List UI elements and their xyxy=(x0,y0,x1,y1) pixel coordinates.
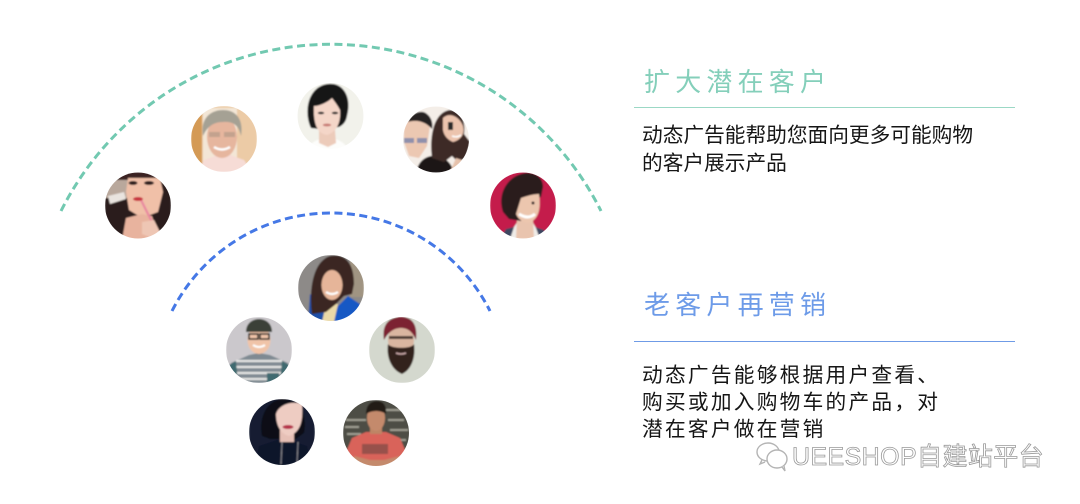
watermark: WeChat logo and account name xyxy=(757,443,1044,471)
text block: expand description: 动态广告能帮助您面向更多可能购物 xyxy=(642,124,973,147)
outer teal dashed arc xyxy=(61,44,601,211)
heading: expand potential customers: 扩大潜在客户 xyxy=(644,67,831,97)
inner blue dashed arc xyxy=(172,213,490,311)
divider: teal xyxy=(634,107,1015,108)
heading: remarketing: 老客户再营销 xyxy=(644,290,831,320)
portrait: short-haired woman xyxy=(297,83,364,149)
portrait: older man xyxy=(191,106,257,172)
portrait: man with cap and striped shirt xyxy=(226,317,292,383)
divider: blue xyxy=(634,341,1015,342)
portrait: woman in dark clothes xyxy=(249,399,315,466)
portrait: couple xyxy=(403,106,470,173)
text block: remarketing description: 动态广告能够根据用户查看、 xyxy=(642,364,940,387)
portrait: woman in blue jacket xyxy=(298,255,364,322)
text block: expand description: 的客户展示产品 xyxy=(642,152,787,175)
portrait: man in red t-shirt xyxy=(343,400,410,467)
text block: remarketing description: 潜在客户做在营销 xyxy=(642,418,826,441)
text block: remarketing description: 购买或加入购物车的产品，对 xyxy=(642,391,940,414)
watermark text: UEESHOP自建站平台 xyxy=(792,443,1044,471)
portrait: bearded man xyxy=(369,317,435,383)
icon: WeChat bubbles xyxy=(757,443,787,471)
portrait: woman on red background xyxy=(490,172,556,239)
portrait: woman with straw xyxy=(105,172,171,240)
